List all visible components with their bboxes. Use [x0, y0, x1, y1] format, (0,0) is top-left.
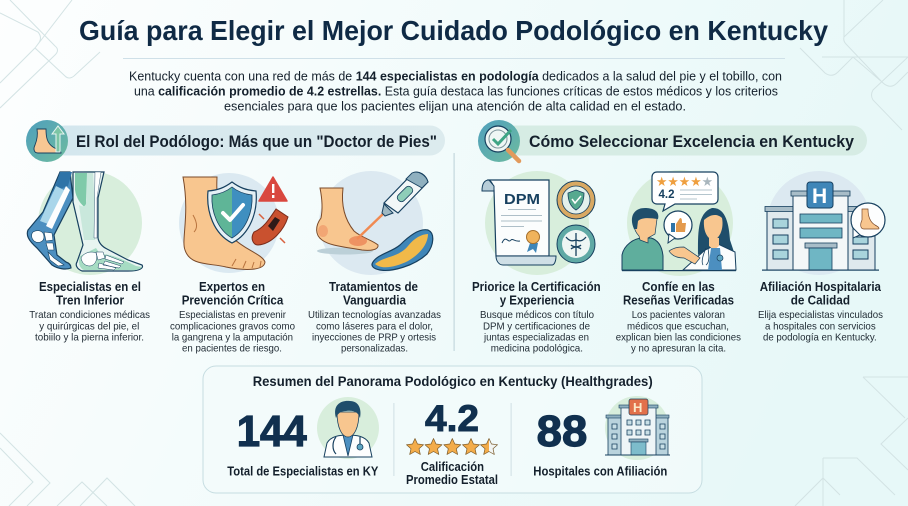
heading	[182, 279, 284, 308]
title: Guía para Elegir el Mejor Cuidado Podológico en Kentucky	[79, 15, 829, 46]
heading: Especialistas en el	[39, 279, 141, 294]
body text: Los pacientes valoran	[632, 309, 725, 321]
icon: foot, shield, warning and artery	[179, 173, 288, 273]
intro text	[129, 70, 782, 114]
heading: Confíe en las	[642, 279, 715, 294]
heading: y Experiencia	[500, 292, 575, 308]
panel: especialistas en el tren inferior	[27, 171, 150, 344]
body text: Especialistas en prevenir	[179, 309, 286, 321]
panel: expertos en prevención crítica	[170, 173, 295, 355]
stat: calificación: Promedio Estatal	[406, 473, 498, 487]
icon: patient, doctor and rating bubble	[622, 170, 736, 276]
section header: cómo seleccionar	[478, 120, 867, 162]
icon: DPM diploma and seals	[482, 171, 595, 275]
icon: patient, doctor and rating bubble: 4.2	[658, 189, 674, 201]
heading	[623, 279, 734, 308]
stat: calificación	[406, 398, 498, 487]
body text: Tratan condiciones médicas	[29, 309, 150, 321]
icon: hospital with foot bubble	[762, 171, 885, 275]
heading: Expertos en	[199, 279, 265, 294]
icon: leg and foot bones	[27, 171, 142, 275]
section header: cómo seleccionar: Cómo Seleccionar Excelencia en Kentucky	[529, 132, 855, 151]
body text: la gangrena y la amputación	[172, 332, 293, 344]
body text: juntas especializadas en	[483, 332, 589, 344]
intro text: Kentucky cuenta con una red de más de 144 especialistas en podología dedicados a la salud del pie y el tobillo, con	[129, 70, 782, 84]
body text: inyecciones de PRP y ortesis	[312, 332, 436, 344]
body text	[480, 309, 594, 355]
intro text: una calificación promedio de 4.2 estrellas. Esta guía destaca las funciones críticas de estos médicos y los criterios	[134, 84, 778, 98]
body text: y no apresuran la cita.	[631, 343, 726, 355]
stat: calificación: 4.2	[425, 398, 479, 439]
body text: a hospitales con servicios	[765, 320, 876, 332]
heading: Priorice la Certificación	[472, 279, 601, 294]
heading	[39, 279, 141, 308]
panel: priorice la certificación	[472, 171, 601, 355]
heading	[472, 279, 601, 308]
body text: y quirúrgicas del pie, el	[39, 320, 139, 332]
body text: Utilizan tecnologías avanzadas	[308, 309, 441, 321]
body text: de podología en Kentucky.	[763, 332, 877, 344]
body text: tobiilo y la pierna inferior.	[35, 332, 144, 344]
heading: de Calidad	[791, 292, 850, 308]
heading: Reseñas Verificadas	[623, 292, 734, 308]
icon: hospital with foot bubble: H	[812, 185, 827, 208]
body text: DPM y certificaciones de	[483, 320, 590, 332]
intro text: esenciales para que los pacientes elijan una atención de alta calidad en el estado.	[224, 100, 686, 114]
icon: hospital: H	[633, 400, 642, 415]
heading: Vanguardia	[343, 292, 407, 308]
icon: laser device, foot and insole	[317, 171, 433, 275]
stat: especialistas	[227, 397, 379, 479]
stat: hospitales: 88	[537, 407, 587, 456]
body text: Elija especialistas vinculados	[758, 309, 883, 321]
heading	[760, 279, 882, 308]
stat: especialistas: 144	[237, 407, 307, 456]
heading: Tratamientos de	[329, 279, 418, 294]
body text: personalizadas.	[341, 343, 408, 355]
panel: afiliación hospitalaria	[758, 171, 885, 344]
body text: como láseres para el dolor,	[316, 320, 433, 332]
stat: calificación: Calificación	[421, 460, 484, 474]
body text: explican bien las condiciones	[616, 332, 741, 344]
body text	[308, 309, 441, 355]
body text: complicaciones gravos como	[170, 320, 295, 332]
body text	[758, 309, 883, 344]
icon: patient, doctor and rating bubble: ★★★★★	[656, 174, 713, 189]
body text: médicos que escuchan,	[627, 320, 729, 332]
summary heading: Resumen del Panorama Podológico en Kentucky (Healthgrades)	[253, 374, 653, 389]
heading	[329, 279, 418, 308]
panel: confíe en las reseñas	[616, 170, 741, 355]
panel: tratamientos de vanguardia	[308, 171, 441, 355]
panel: resumen del panorama	[203, 366, 702, 493]
body text	[170, 309, 295, 355]
stat: hospitales: Hospitales con Afiliación	[533, 465, 667, 479]
stat: hospitales	[533, 396, 670, 479]
section header: rol del podólogo: El Rol del Podólogo: Más que un "Doctor de Pies"	[76, 132, 437, 151]
section header: rol del podólogo	[26, 120, 445, 162]
heading: Tren Inferior	[56, 292, 124, 308]
divider between sections	[454, 153, 455, 351]
body text	[29, 309, 150, 344]
stat: especialistas: Total de Especialistas en KY	[227, 465, 379, 479]
body text	[616, 309, 741, 355]
icon: DPM diploma and seals: DPM	[504, 191, 540, 208]
body text: Busque médicos con título	[480, 309, 594, 321]
rating stars	[406, 438, 498, 454]
body text: medicina podológica.	[491, 343, 583, 355]
heading: Afiliación Hospitalaria	[760, 279, 882, 294]
body text: en pacientes de riesgo.	[182, 343, 282, 355]
heading: Prevención Crítica	[182, 292, 284, 308]
icon: doctor	[317, 397, 379, 459]
